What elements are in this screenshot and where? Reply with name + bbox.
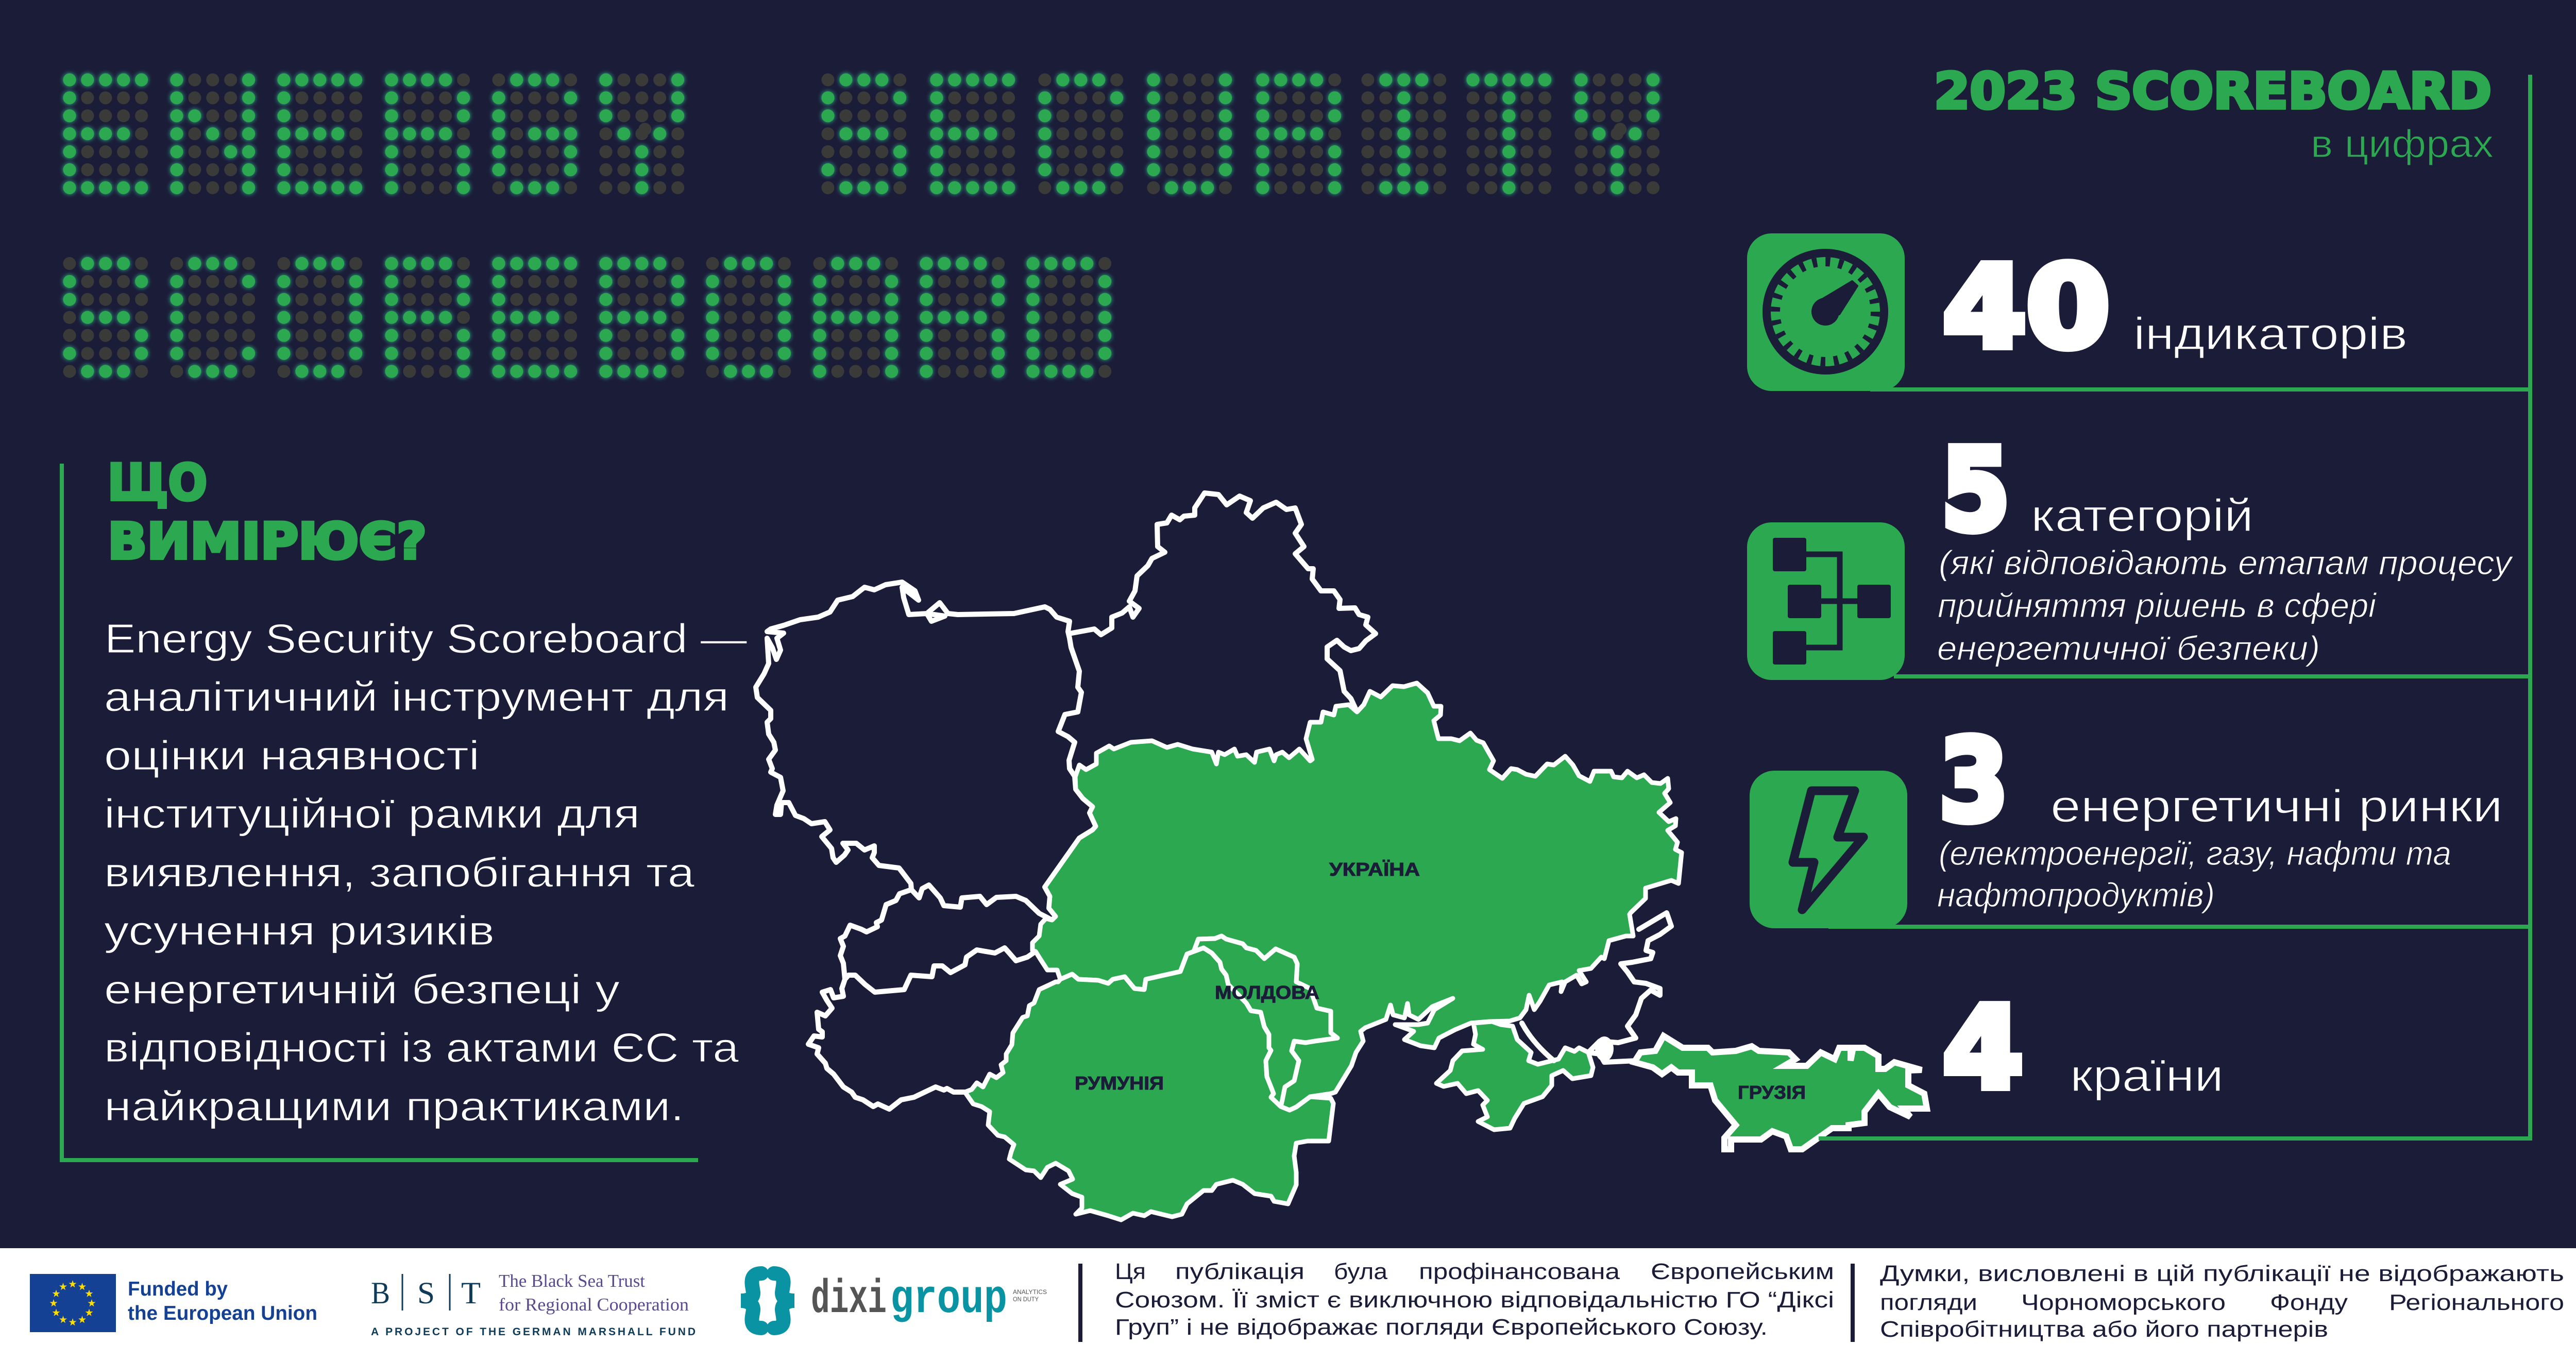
funding disclaimer: Європейським	[1651, 1259, 1834, 1284]
stat: 4 countries	[1943, 983, 2224, 1114]
label: країни	[2070, 1050, 2224, 1101]
description text: енергетичній безпеці у	[104, 966, 620, 1012]
BST disclaimer	[1880, 1261, 2564, 1342]
Arabat spit	[1522, 1023, 1554, 1061]
BST disclaimer: Регіонального	[2389, 1290, 2564, 1315]
logo: Black Sea Trust: for Regional Cooperation	[499, 1295, 689, 1315]
logo: Black Sea Trust: T	[461, 1276, 481, 1310]
heading: what does it measure: ЩО	[108, 454, 207, 512]
note: прийняття рішень в сфері	[1938, 586, 2377, 624]
country: Crimea	[1436, 1022, 1593, 1130]
description text: виявлення, запобігання та	[104, 849, 695, 895]
note: (електроенергії, газу, нафти та	[1939, 834, 2451, 872]
logo: DiXi Group: dixi	[811, 1272, 887, 1326]
country: Georgia	[1634, 1036, 1927, 1149]
note: нафтопродуктів)	[1937, 876, 2215, 914]
dot-matrix title: SCOREBOARD	[70, 264, 1105, 371]
left bracket frame	[62, 464, 698, 1160]
label: Ukraine: УКРАЇНА	[1329, 859, 1420, 880]
country: Romania	[965, 948, 1333, 1220]
footer separators	[1080, 1264, 1853, 1342]
logo: DiXi Group	[741, 1272, 1047, 1328]
note	[1937, 834, 2451, 914]
note: енергетичної безпеки)	[1937, 629, 2320, 667]
logo: EU	[30, 1274, 317, 1332]
Azov coastline outline	[1588, 913, 1671, 1062]
description text: Energy Security Scoreboard —	[105, 616, 747, 661]
icon: lightning bolt	[1750, 771, 1907, 928]
label: Georgia: ГРУЗІЯ	[1738, 1082, 1806, 1103]
label: категорій	[2031, 490, 2253, 541]
logo: DiXi Group: ON DUTY	[1013, 1296, 1039, 1303]
country outline: Slovakia	[840, 890, 1036, 992]
funding disclaimer: публікація	[1175, 1259, 1304, 1284]
icon: gauge	[1747, 233, 1905, 391]
stat: 5 categories	[1747, 426, 2514, 680]
heading: 2023 scoreboard: 2023 SCOREBOARD	[1934, 62, 2492, 120]
logo: Black Sea Trust: The Black Sea Trust	[499, 1271, 645, 1291]
icon: hierarchy	[1747, 522, 1905, 680]
funding disclaimer	[1115, 1259, 1834, 1340]
logo: EU: the European Union	[128, 1302, 317, 1324]
funding disclaimer: профінансована	[1419, 1259, 1620, 1284]
country outline: Poland	[756, 582, 1096, 920]
dot-matrix title: SECURITY	[828, 80, 1653, 188]
dot-matrix title: ENERGY	[70, 80, 678, 188]
BST disclaimer: Чорноморського	[2021, 1290, 2226, 1315]
number: 3	[1939, 716, 2008, 846]
country outline: Hungary	[808, 979, 965, 1109]
logo: EU: Funded by	[128, 1278, 228, 1300]
footer band	[0, 1248, 2576, 1361]
BST disclaimer: погляди	[1880, 1290, 1977, 1315]
subheading: in numbers: в цифрах	[2311, 122, 2494, 166]
map of the region	[756, 493, 1927, 1220]
logo: Black Sea Trust: B	[371, 1276, 390, 1310]
description text: відповідності із актами ЄС та	[104, 1025, 739, 1070]
label: індикаторів	[2133, 308, 2408, 359]
country: Ukraine	[1032, 683, 1682, 1110]
description text: аналітичний інструмент для	[104, 674, 729, 720]
funding disclaimer: була	[1334, 1259, 1388, 1284]
country outline: Belarus	[1069, 493, 1376, 712]
note: (які відповідають етапам процесу	[1939, 543, 2514, 582]
BST disclaimer: Фонду	[2270, 1290, 2348, 1315]
logo: Black Sea Trust: S	[417, 1276, 435, 1310]
BST disclaimer: Співробітництва або його партнерів	[1880, 1317, 2328, 1342]
country: Moldova	[1194, 936, 1337, 1107]
logo: Black Sea Trust	[371, 1271, 696, 1338]
description text	[104, 616, 747, 1129]
funding disclaimer: Груп” і не відображає погляди Європейського Союзу.	[1115, 1315, 1768, 1340]
panel: what it measures	[62, 454, 747, 1160]
number: 4	[1943, 983, 2023, 1114]
logo: Black Sea Trust: A PROJECT OF THE GERMAN MARSHALL FUND	[371, 1326, 696, 1338]
heading: what does it measure: ВИМІРЮЄ?	[108, 513, 427, 570]
Kerch blob	[1595, 1036, 1614, 1061]
funding disclaimer: Ця	[1115, 1259, 1146, 1284]
logo: DiXi Group: ANALYTICS	[1013, 1288, 1047, 1296]
description text: найкращими практиками.	[104, 1083, 684, 1129]
BST disclaimer: Думки, висловлені в цій публікації не відображають	[1880, 1261, 2564, 1286]
label: енергетичні ринки	[2050, 780, 2503, 831]
funding disclaimer: Союзом. Її зміст є виключною відповідальністю ГО “Діксі	[1115, 1287, 1834, 1313]
stat: 40 indicators	[1747, 233, 2408, 391]
scoreboard frame lines	[1819, 75, 2530, 1141]
number: 40	[1943, 243, 2110, 373]
label: Moldova: МОЛДОВА	[1215, 982, 1319, 1003]
note	[1937, 543, 2514, 667]
heading: what does it measure	[108, 454, 427, 570]
logo: DiXi Group: group	[890, 1272, 1007, 1326]
label: Romania: РУМУНІЯ	[1075, 1073, 1164, 1094]
stat: 3 markets	[1750, 716, 2503, 928]
description text: усунення ризиків	[104, 908, 495, 954]
description text: інституційної рамки для	[104, 791, 640, 837]
number: 5	[1941, 426, 2010, 556]
description text: оцінки наявності	[104, 733, 480, 778]
